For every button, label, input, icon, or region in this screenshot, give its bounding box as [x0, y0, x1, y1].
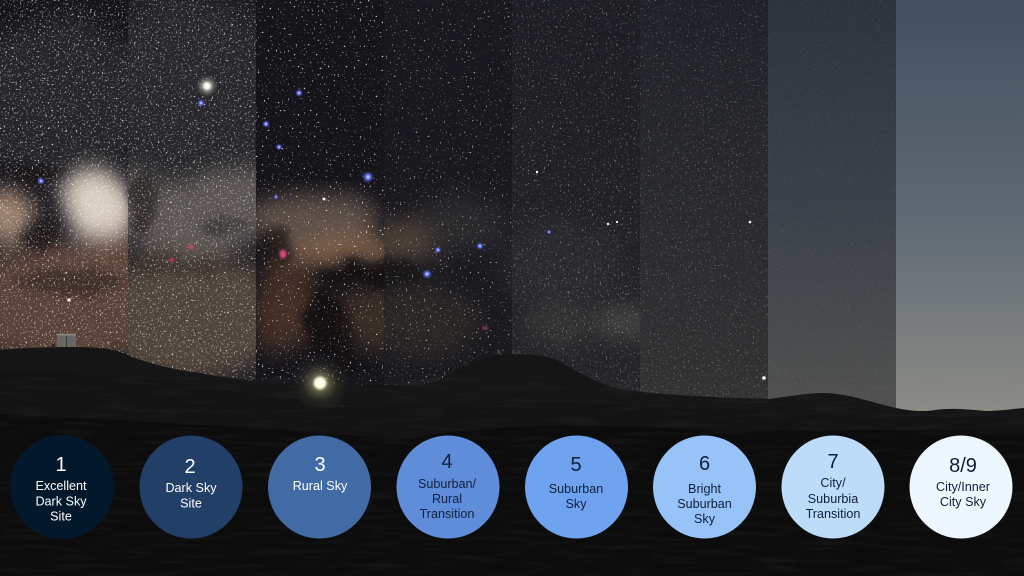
milky way band 1 [0, 16, 128, 355]
label 8/9: City Sky [940, 495, 987, 509]
number 1: 1 [55, 454, 67, 476]
number 2: 2 [184, 456, 196, 478]
label 1: Site [50, 510, 72, 524]
ground texture [0, 375, 1024, 576]
label 6: Suburban [677, 497, 732, 511]
label 1: Dark Sky [35, 494, 87, 508]
scale circle 5 [525, 436, 628, 538]
label 8/9: City/Inner [936, 480, 990, 494]
label 1: Excellent [35, 479, 87, 493]
label 6: Bright [688, 482, 721, 496]
number 8/9: 8/9 [949, 455, 977, 477]
label 5: Sky [566, 497, 587, 511]
star field [0, 0, 1024, 420]
label 2: Dark Sky [165, 481, 217, 495]
band 5 veil [512, 0, 640, 420]
number 4: 4 [441, 451, 453, 473]
lower ground [0, 372, 1024, 576]
band 2 veil [128, 0, 256, 420]
night sky panorama [0, 0, 1024, 420]
scale circle 7 [782, 436, 884, 538]
label 3: Rural Sky [293, 479, 348, 493]
band 4 veil [384, 0, 512, 420]
label 4: Suburban/ [418, 477, 477, 491]
bright stars [37, 75, 766, 380]
label 7: Suburbia [808, 492, 858, 506]
scale circle 2 [140, 436, 242, 538]
milky way band 3 [256, 182, 384, 360]
band 7 veil [768, 0, 896, 420]
label 2: Site [180, 496, 202, 510]
observatory building [52, 334, 76, 348]
number 6: 6 [699, 453, 710, 475]
dense star field left [0, 0, 256, 420]
ground landscape [0, 347, 1024, 576]
number 7: 7 [827, 451, 839, 473]
telescopes on central hill [497, 350, 520, 354]
scale circle 4 [396, 436, 500, 538]
band 6 veil [640, 0, 768, 420]
label 7: Transition [806, 507, 860, 521]
label 4: Rural [432, 492, 462, 506]
label 5: Suburban [549, 482, 603, 496]
band 8 sky [896, 0, 1024, 420]
milky way bands 4 and 5 [360, 197, 646, 358]
label 6: Sky [694, 512, 716, 526]
label 4: Transition [420, 507, 474, 521]
label 7: City/ [820, 476, 846, 490]
faint stars bands 5 to 6 [512, 0, 768, 420]
dust lanes [5, 163, 427, 375]
foreground [0, 414, 1024, 576]
milky way band 2 [128, 6, 256, 379]
faint stars band 7 [768, 0, 896, 420]
scale circle 3 [268, 436, 371, 538]
bright planet glow [290, 353, 350, 413]
pink nebulae [170, 245, 488, 330]
scale circle 6 [653, 436, 756, 538]
scale circle 8/9 [910, 436, 1012, 538]
number 5: 5 [570, 454, 582, 476]
number 3: 3 [314, 454, 326, 476]
scale circle 1 [10, 435, 114, 539]
